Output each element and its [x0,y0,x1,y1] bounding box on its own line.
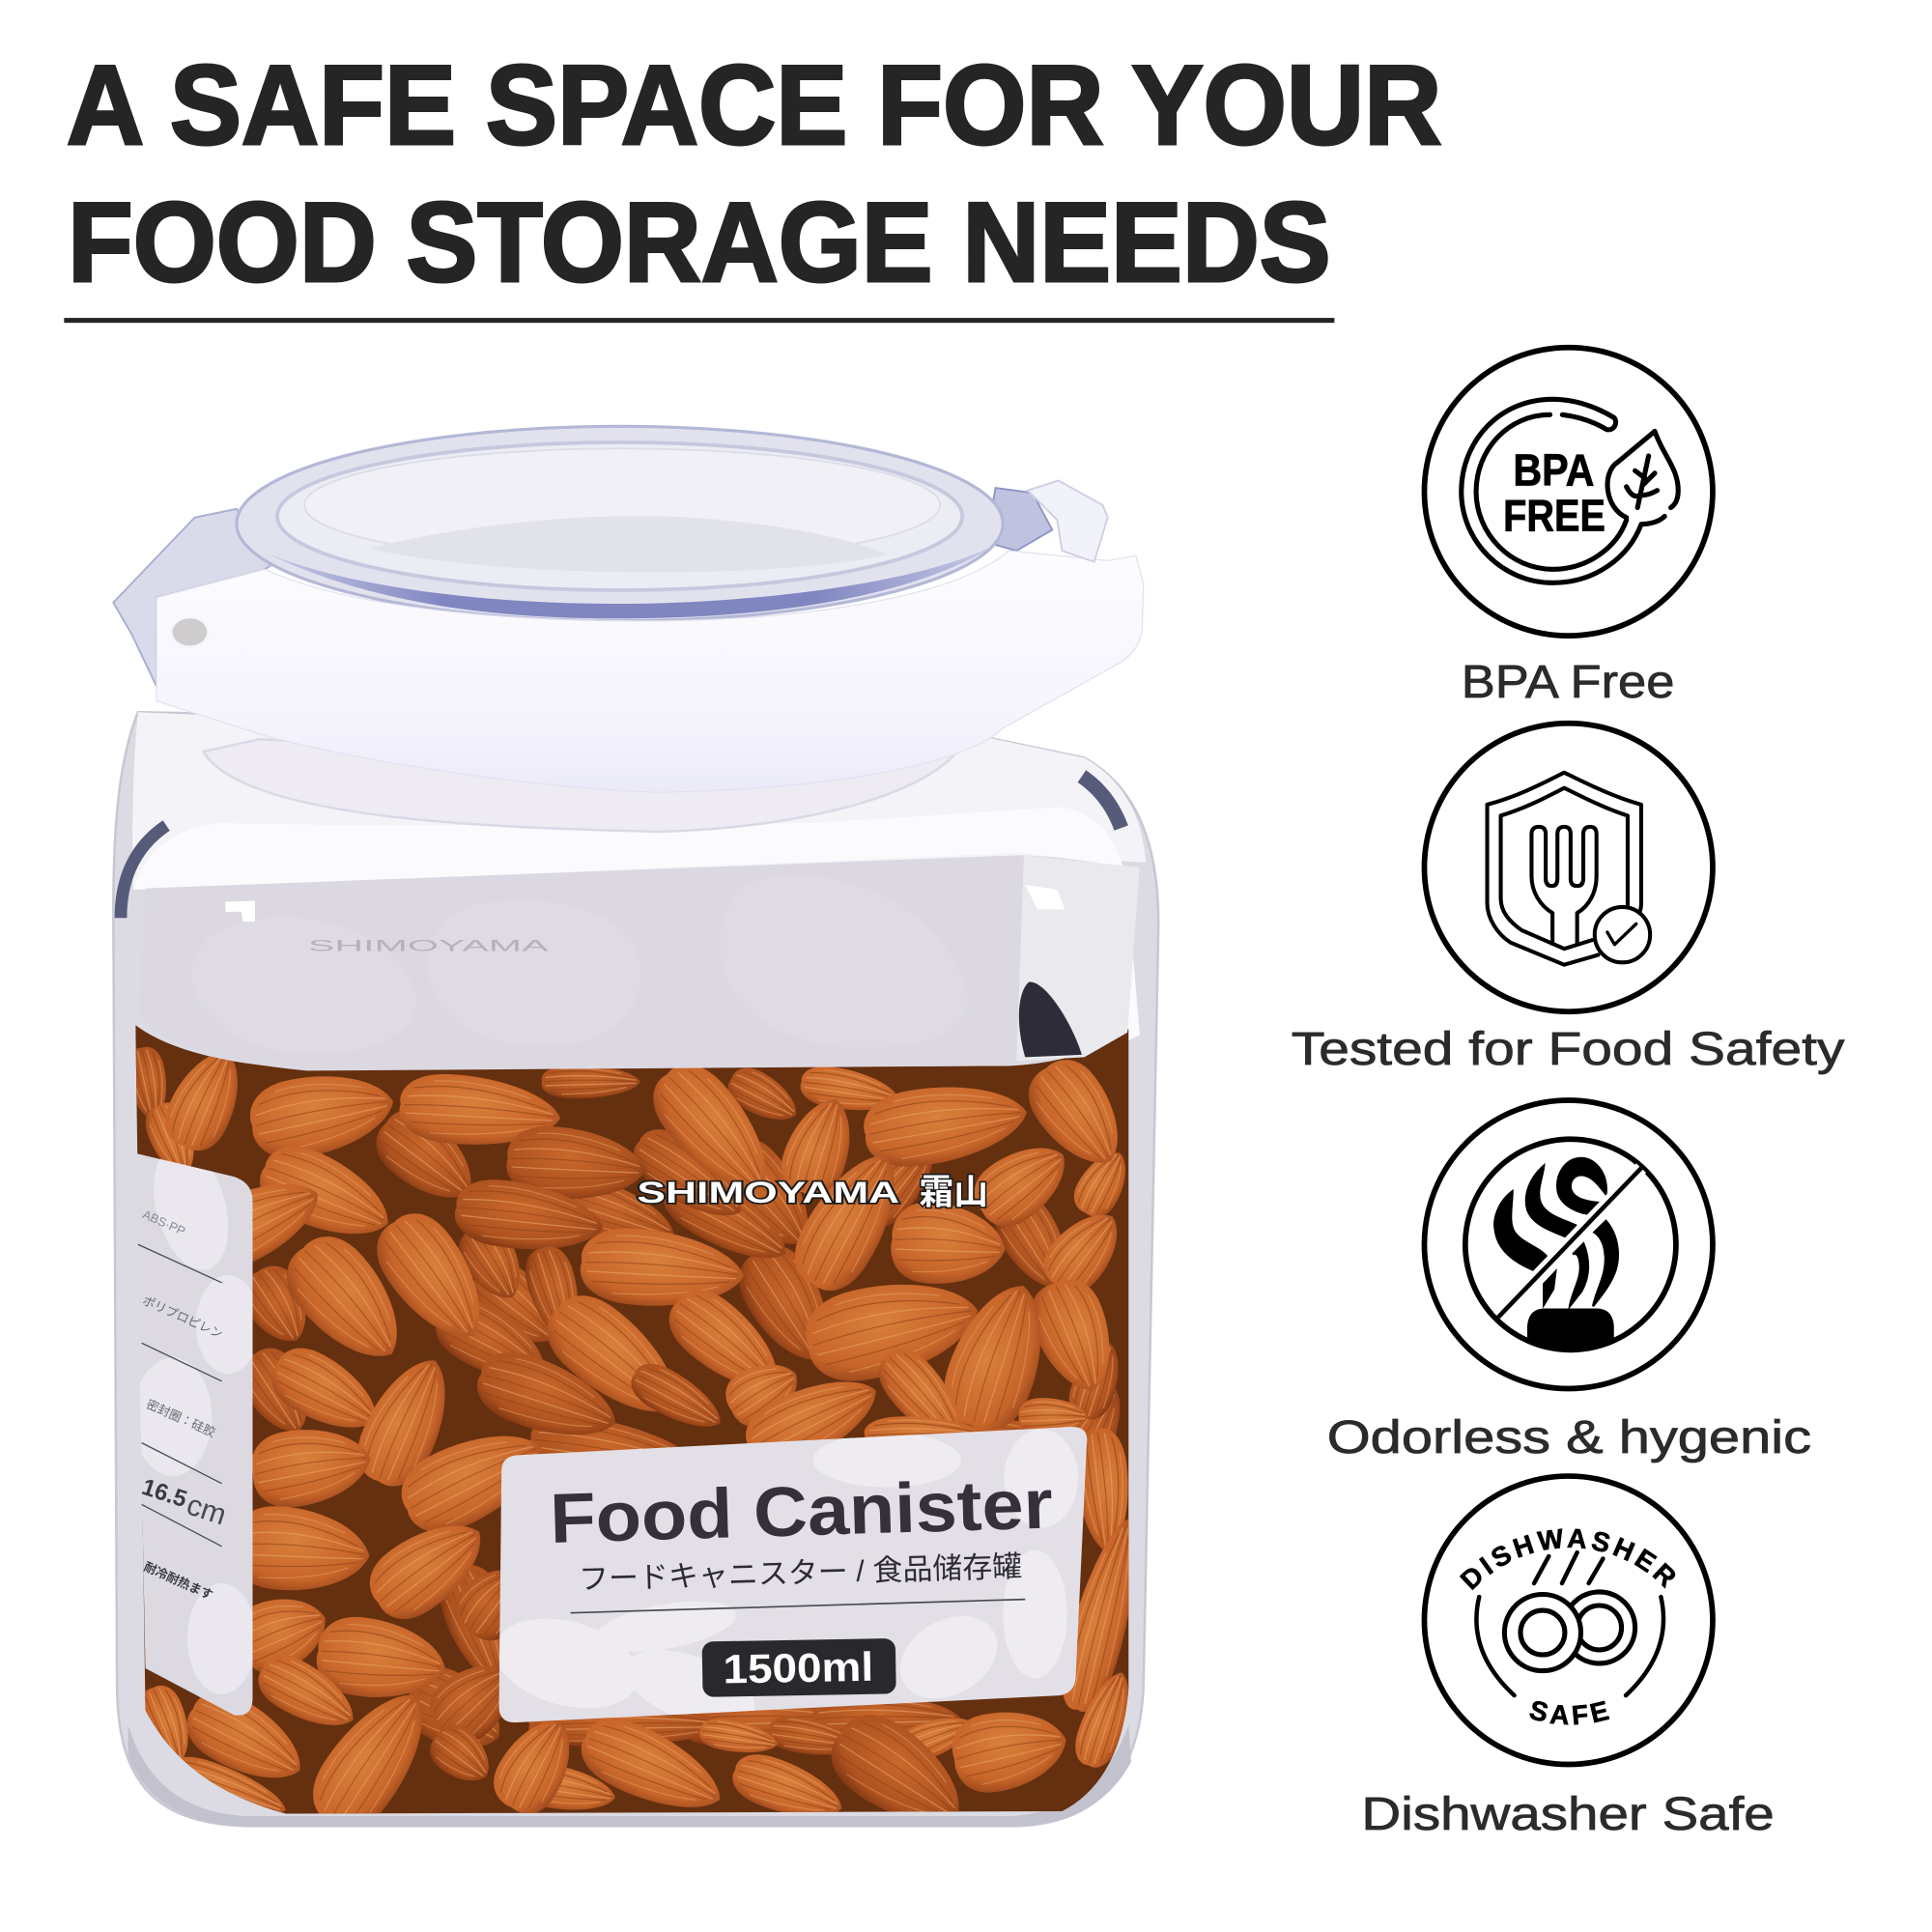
jar neck [203,739,955,832]
left hinge clear plastic [113,509,272,686]
icon: crossed-out steam [1494,1158,1618,1358]
badge: Tested for Food Safety [1424,724,1713,1011]
handle hole [171,617,209,647]
almond fill [123,1016,1153,1848]
badge: Dishwasher Safe [1422,1473,1716,1768]
right metallic strip [1016,855,1140,1061]
top label band [138,855,1024,1070]
left side label: ABS·PP [140,1207,187,1238]
left side label: 16.5 [139,1474,190,1513]
left side label [137,1153,253,1716]
icon: BPA free leaf [1462,399,1678,582]
handle band [156,551,1144,792]
front product label: Food Canister [549,1465,1054,1558]
product: food canister jar [113,426,1158,1848]
left side label: 密封圈：硅胶 [144,1397,218,1440]
icon: dishwasher safe plates: SAFE [1529,1700,1609,1725]
left side label: ポリプロピレン [140,1293,225,1342]
label: Tested for Food Safety: Tested for Food Safety [1292,1023,1845,1075]
brand logo [637,1173,988,1211]
label: Odorless & hygenic: Odorless & hygenic [1327,1411,1811,1463]
background filler almonds [253,1349,306,1432]
jar dark reflections [121,826,166,918]
dark reflection blob [1019,981,1082,1057]
badge: BPA Free [1424,348,1713,636]
brand logo: 霜山 [920,1173,988,1211]
badge: BPA Free: FREE [1503,491,1605,541]
badge: Odorless & hygenic [1424,1100,1713,1389]
icon: dishwasher safe plates: DISHWASHER [1459,1528,1675,1590]
faint reflected logo: SHIMOYAMA [308,937,551,955]
icon: dishwasher safe plates [1459,1528,1675,1725]
latch clip [1028,480,1108,562]
front product label [485,1427,1087,1742]
icon: shield with fork [1488,773,1650,965]
title: A SAFE SPACE FOR YOUR [67,42,1441,168]
left side label: 耐冷耐热ます [142,1559,215,1603]
specular highlights [225,885,1065,922]
brand logo: SHIMOYAMA [637,1175,899,1209]
jar body [113,712,1158,1826]
front product label: 1500ml [723,1644,873,1691]
left side label: cm [183,1489,230,1532]
title: FOOD STORAGE NEEDS [68,179,1331,305]
title [67,42,1441,305]
badge: BPA Free: BPA [1513,445,1595,496]
right hinge clear plastic [985,488,1052,551]
lid [237,426,1003,621]
jar shoulder [132,712,1146,890]
label: Dishwasher Safe: Dishwasher Safe [1361,1788,1775,1840]
front product label: フードキャニスター / 食品储存罐 [579,1550,1023,1596]
label: BPA Free: BPA Free [1462,656,1674,708]
